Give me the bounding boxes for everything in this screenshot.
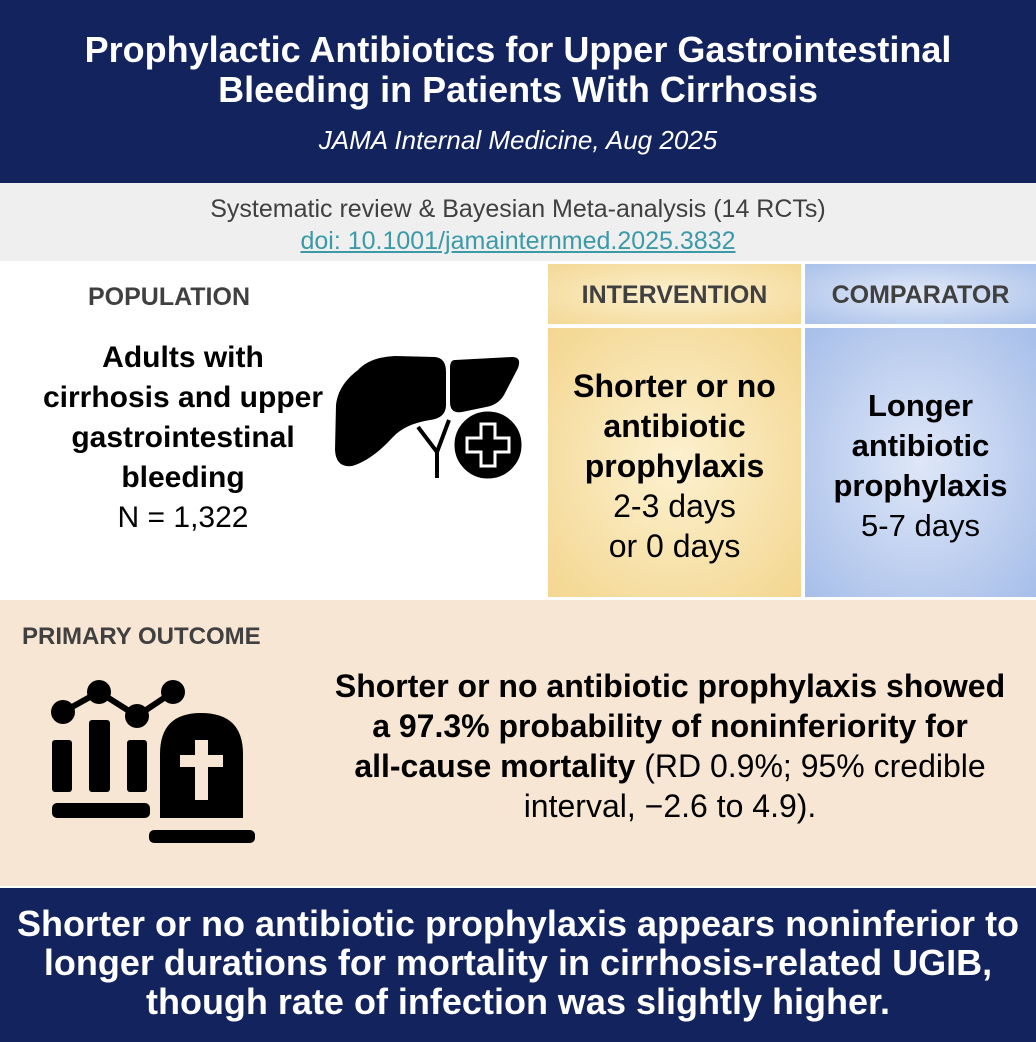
title xyxy=(85,29,951,110)
study design band xyxy=(0,183,1036,261)
intervention text: 2-3 days xyxy=(613,488,736,524)
comparator text: 5-7 days xyxy=(861,508,980,543)
conclusion banner: Shorter or no antibiotic prophylaxis appears noninferior to xyxy=(17,903,1019,944)
comparator text xyxy=(805,328,1036,597)
intervention text xyxy=(548,328,801,597)
conclusion banner xyxy=(0,888,1036,1042)
study design band: Systematic review & Bayesian Meta-analysis (14 RCTs) xyxy=(210,195,826,223)
journal subtitle: JAMA Internal Medicine, Aug 2025 xyxy=(319,125,717,155)
intervention text: or 0 days xyxy=(609,528,740,564)
title: Prophylactic Antibiotics for Upper Gastrointestinal xyxy=(85,29,951,70)
comparator text: antibiotic xyxy=(852,428,989,463)
conclusion banner: longer durations for mortality in cirrhosis-related UGIB, xyxy=(44,942,992,983)
intervention text: prophylaxis xyxy=(585,448,764,484)
outcome heading: PRIMARY OUTCOME xyxy=(22,623,261,650)
title: Bleeding in Patients With Cirrhosis xyxy=(218,69,818,110)
panel: primary outcome xyxy=(0,600,1036,886)
study design band: doi: 10.1001/jamainternmed.2025.3832 xyxy=(300,227,736,255)
comparator text: Longer xyxy=(868,388,973,423)
population text xyxy=(43,341,323,534)
icon: liver with plus xyxy=(335,356,522,478)
comparator heading: COMPARATOR xyxy=(832,281,1009,309)
conclusion banner: though rate of infection was slightly higher. xyxy=(146,981,890,1022)
population text: Adults with xyxy=(102,341,264,374)
comparator text: prophylaxis xyxy=(834,468,1008,503)
population heading: POPULATION xyxy=(88,283,250,311)
population text: cirrhosis and upper xyxy=(43,381,323,414)
comparator heading xyxy=(805,264,1036,324)
intervention text: Shorter or no xyxy=(573,368,776,404)
icon: chart and tombstone xyxy=(51,680,255,843)
outcome text: interval, −2.6 to 4.9). xyxy=(524,788,816,824)
panel: comparator xyxy=(805,264,1036,597)
outcome text: a 97.3% probability of noninferiority for xyxy=(372,708,968,744)
intervention heading: INTERVENTION xyxy=(582,281,767,309)
header banner xyxy=(0,0,1036,183)
intervention text: antibiotic xyxy=(603,408,746,444)
outcome text xyxy=(335,668,1005,824)
panel: population xyxy=(43,283,522,534)
outcome text: Shorter or no antibiotic prophylaxis showed xyxy=(335,668,1005,704)
outcome text: all-cause mortality (RD 0.9%; 95% credible xyxy=(354,748,986,784)
population text: N = 1,322 xyxy=(118,501,248,534)
panel: intervention xyxy=(548,264,801,597)
intervention heading xyxy=(548,264,801,324)
population text: bleeding xyxy=(121,461,245,494)
population text: gastrointestinal xyxy=(71,421,295,454)
